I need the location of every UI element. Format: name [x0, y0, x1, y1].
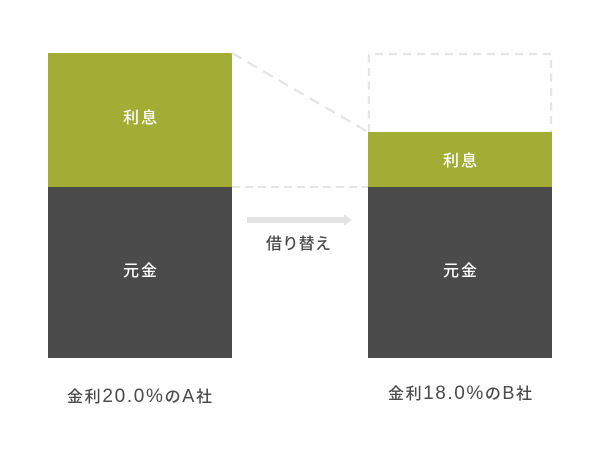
segment: interest B [368, 132, 552, 187]
dashed outline: previous interest [369, 54, 551, 132]
segment: principal B [368, 187, 552, 358]
segment: interest A: 利息 [123, 109, 157, 127]
segment: principal B: 元金 [443, 262, 477, 280]
label: company A rate: 金利20.0%のA社 [67, 386, 212, 407]
arrow: refinancing direction [247, 214, 352, 226]
segment: interest B: 利息 [443, 152, 477, 170]
bar: company B [368, 54, 552, 358]
segment: interest A [48, 53, 232, 187]
label: company B rate: 金利18.0%のB社 [388, 383, 532, 404]
dashed connector: interest top [232, 53, 368, 132]
segment: principal A: 元金 [123, 262, 157, 280]
label: refinancing: 借り替え [266, 235, 331, 253]
bar: company A [48, 53, 232, 358]
dashed connector: interest base [232, 186, 368, 188]
segment: principal A [48, 187, 232, 358]
